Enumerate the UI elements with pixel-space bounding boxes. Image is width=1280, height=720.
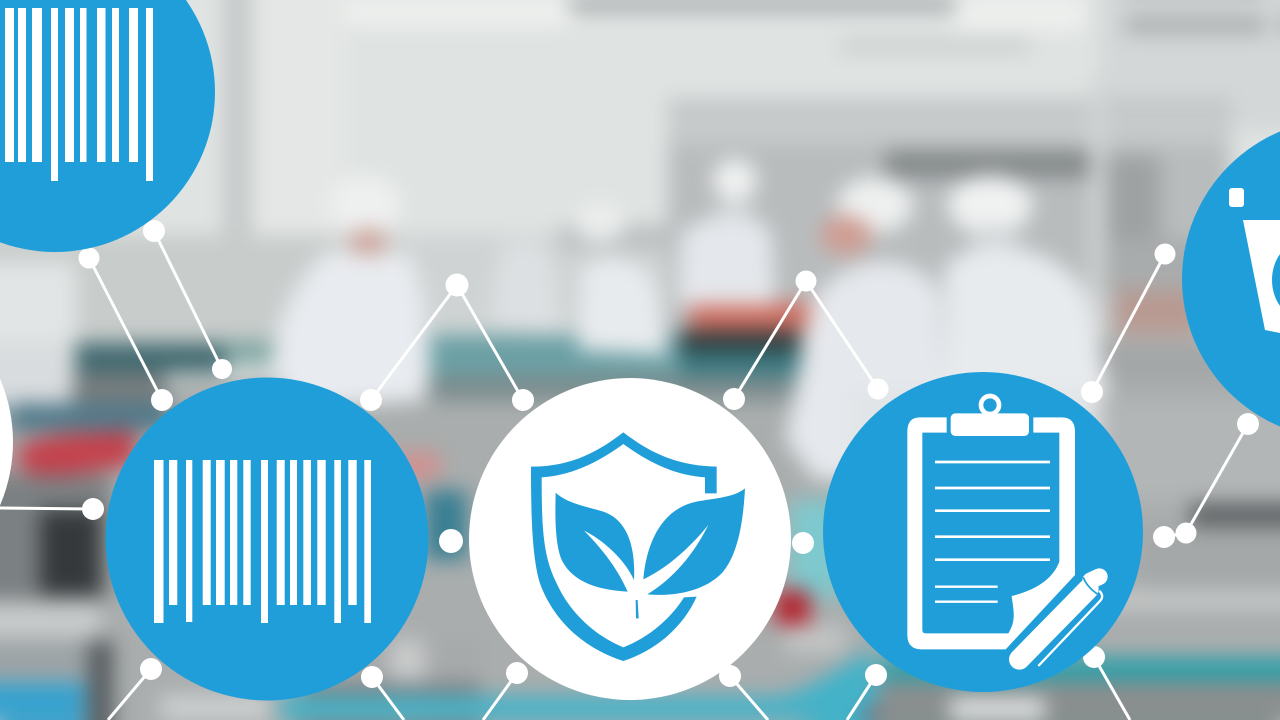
network: centre-left peak xyxy=(360,274,534,411)
icon: barcode top-left xyxy=(0,0,215,252)
circle: white sliver left xyxy=(0,281,13,603)
icon: partial cup on right circle xyxy=(1182,119,1280,439)
icon: barcode circle xyxy=(106,378,428,700)
icon: clipboard with pen xyxy=(823,372,1143,692)
network: right links xyxy=(1081,244,1259,548)
connector lines and dots xyxy=(0,220,1259,720)
network: bottom links xyxy=(108,646,1130,720)
network: top-left links xyxy=(78,220,232,411)
icon: shield with leaves xyxy=(469,378,791,700)
network: centre-right peak xyxy=(723,270,888,410)
network: side dots xyxy=(0,498,814,554)
